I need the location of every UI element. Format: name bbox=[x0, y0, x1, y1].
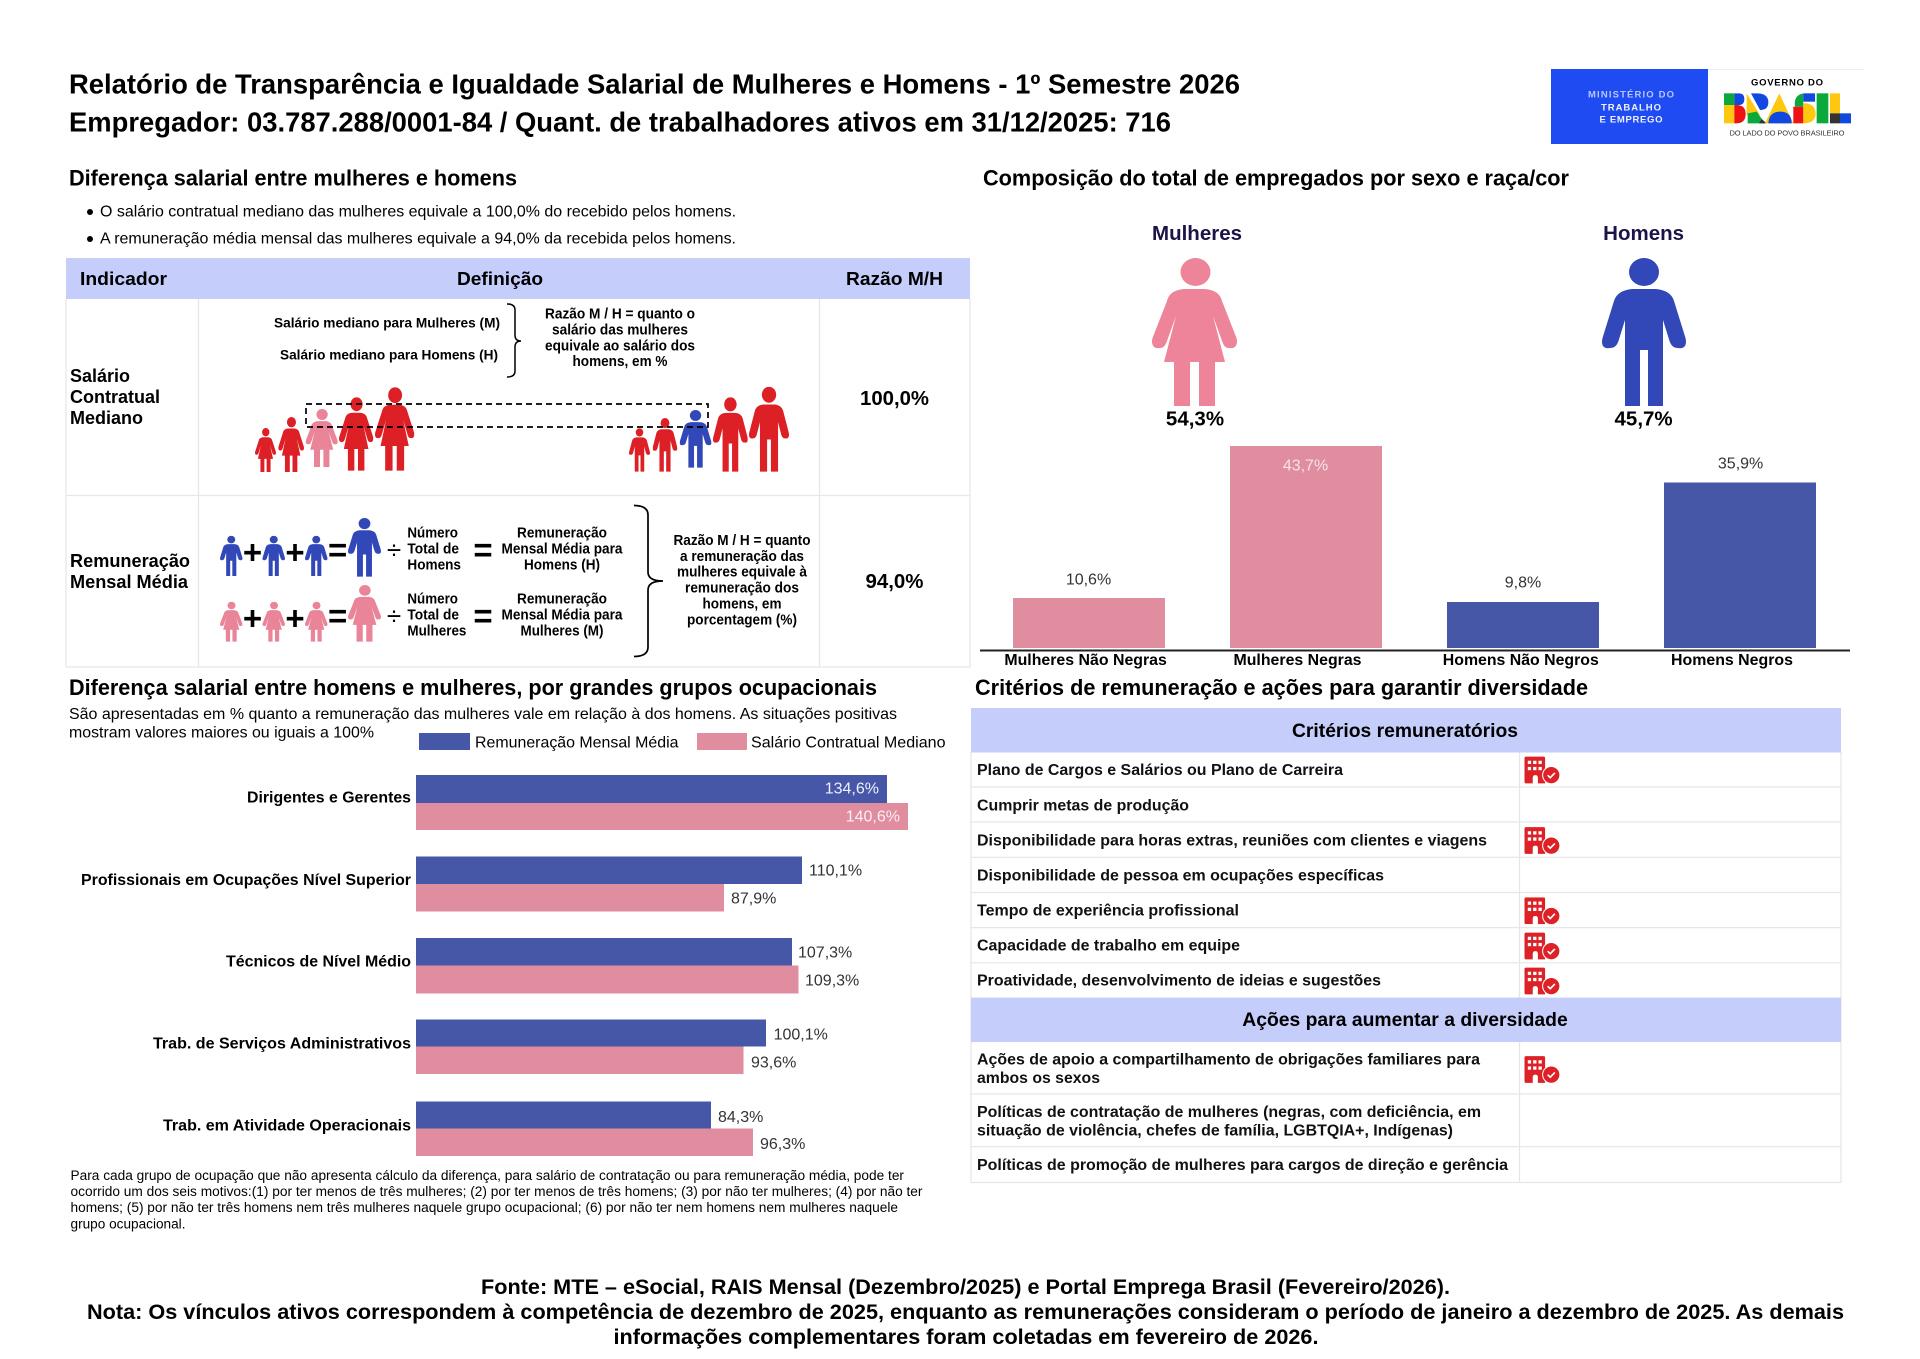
bar chart: composition by race: Homens Não Negros bbox=[1443, 652, 1599, 669]
group: Dirigentes e Gerentes: 140,6% bbox=[846, 808, 900, 826]
panel: composition women bbox=[1152, 222, 1242, 430]
formula: women: Número bbox=[407, 592, 458, 608]
formula: men: Homens bbox=[407, 558, 461, 574]
group: Profissionais bbox=[81, 856, 862, 912]
logo: Governo do Brasil: DO LADO DO POVO BRASILEIRO bbox=[1730, 128, 1845, 138]
row: remuneração mensal média: Remuneração bbox=[70, 551, 190, 571]
actions list: ambos os sexos bbox=[977, 1070, 1100, 1087]
row: salário contratual mediano bbox=[70, 304, 929, 472]
bar chart: composition by race bbox=[980, 446, 1850, 669]
row: remuneração mensal média: mulheres equivale à bbox=[677, 565, 807, 581]
bar chart: composition by race: Mulheres Negras bbox=[1234, 652, 1362, 669]
table header: ações: Ações para aumentar a diversidade bbox=[1242, 1009, 1568, 1031]
legend: Remuneração Mensal Média bbox=[475, 734, 679, 752]
group: Técnicos: Técnicos de Nível Médio bbox=[226, 954, 411, 970]
formula: women bbox=[220, 585, 623, 642]
footer: source and note: informações complementares foram coletadas em fevereiro de 2026. bbox=[614, 1325, 1318, 1349]
footnote: Para cada grupo de ocupação que não apresenta cálculo da diferença, para salário de contratação ou para remuneração média, pode ter bbox=[70, 1168, 904, 1183]
formula: women: + bbox=[285, 600, 305, 636]
table header: Indicador bbox=[80, 268, 167, 289]
bullets bbox=[87, 204, 736, 248]
logo: Ministério do Trabalho e Emprego: TRABALHO bbox=[1601, 102, 1661, 114]
formula: women: ÷ bbox=[387, 601, 401, 631]
formula: men: = bbox=[473, 532, 493, 568]
legend bbox=[419, 733, 946, 752]
actions list bbox=[977, 1052, 1508, 1174]
bar chart: composition by race: 43,7% bbox=[1283, 458, 1328, 474]
group: Técnicos bbox=[226, 938, 859, 994]
formula: men: Número bbox=[407, 526, 458, 542]
formula: men: + bbox=[243, 534, 262, 570]
row: salário contratual mediano: Salário mediano para Homens (H) bbox=[280, 348, 498, 362]
row: remuneração mensal média bbox=[70, 506, 924, 656]
formula: men: = bbox=[328, 532, 347, 568]
heading: composição: Composição do total de empregados por sexo e raça/cor bbox=[983, 166, 1569, 190]
table header: Definição bbox=[457, 268, 543, 289]
formula: women: = bbox=[328, 598, 347, 634]
row: salário contratual mediano: Mediano bbox=[70, 408, 143, 428]
actions list: Políticas de promoção de mulheres para cargos de direção e gerência bbox=[977, 1157, 1508, 1174]
group: Serviços Administrativos bbox=[153, 1020, 828, 1074]
row: remuneração mensal média: Razão M / H = quanto bbox=[674, 533, 811, 549]
criteria list bbox=[977, 762, 1487, 989]
group: Profissionais: Profissionais em Ocupações Nível Superior bbox=[81, 872, 411, 889]
row: salário contratual mediano: Salário mediano para Mulheres (M) bbox=[274, 316, 500, 330]
bullets: O salário contratual mediano das mulheres equivale a 100,0% do recebido pelos homens. bbox=[100, 204, 736, 220]
panel: composition men: Homens bbox=[1603, 222, 1684, 245]
heading: diferença salarial: Diferença salarial entre mulheres e homens bbox=[69, 166, 517, 190]
heading: diferença por grupos ocupacionais: Diferença salarial entre homens e mulheres, por grandes grupos ocupacionais bbox=[69, 675, 877, 700]
row: remuneração mensal média: porcentagem (%) bbox=[687, 613, 797, 629]
formula: women: = bbox=[473, 598, 493, 634]
actions list: Políticas de contratação de mulheres (negras, com deficiência, em bbox=[977, 1104, 1481, 1121]
row: salário contratual mediano: homens, em % bbox=[572, 354, 668, 370]
row: salário contratual mediano: Razão M / H = quanto o bbox=[545, 306, 695, 322]
bar chart: occupational groups bbox=[81, 775, 908, 1156]
formula: women: Mulheres bbox=[407, 624, 466, 640]
icon group: women ordered by salary bbox=[255, 387, 414, 472]
logo: Ministério do Trabalho e Emprego: MINISTÉRIO DO bbox=[1588, 90, 1674, 100]
bar chart: composition by race: 35,9% bbox=[1718, 456, 1763, 472]
table header: critérios remuneratórios bbox=[971, 708, 1841, 752]
description text: São apresentadas em % quanto a remuneração das mulheres vale em relação à dos homens. As situações positivas bbox=[69, 706, 897, 723]
panel: composition men bbox=[1602, 222, 1686, 430]
bar chart: composition by race: 10,6% bbox=[1066, 572, 1111, 588]
icons: criteria adopted bbox=[1524, 757, 1560, 995]
description text bbox=[69, 706, 897, 742]
criteria list: Capacidade de trabalho em equipe bbox=[977, 937, 1240, 954]
group: Serviços Administrativos: Trab. de Serviços Administrativos bbox=[153, 1036, 411, 1052]
row: salário contratual mediano: equivale ao salário dos bbox=[545, 338, 695, 354]
logo: Governo do Brasil: GOVERNO DO bbox=[1751, 78, 1823, 88]
icon: action adopted bbox=[1524, 1056, 1560, 1083]
row: remuneração mensal média: a remuneração das bbox=[680, 549, 804, 565]
logo: Ministério do Trabalho e Emprego bbox=[1551, 69, 1708, 144]
row: remuneração mensal média: homens, em bbox=[702, 596, 782, 612]
footer: source and note: Fonte: MTE – eSocial, RAIS Mensal (Dezembro/2025) e Portal Emprega Brasil (Fevereiro/2026). bbox=[481, 1275, 1450, 1299]
table header: Razão M/H bbox=[846, 268, 943, 289]
group: Atividade Operacionais: 84,3% bbox=[718, 1109, 763, 1126]
group: Atividade Operacionais: 96,3% bbox=[760, 1136, 805, 1153]
table header: critérios remuneratórios: Critérios remuneratórios bbox=[1292, 720, 1518, 742]
formula: women: Total de bbox=[407, 608, 459, 624]
group: Profissionais: 87,9% bbox=[731, 890, 776, 908]
formula: men: + bbox=[285, 534, 305, 570]
panel: composition women: Mulheres bbox=[1152, 222, 1242, 245]
logo: Governo do Brasil bbox=[1708, 69, 1864, 138]
legend: Salário Contratual Mediano bbox=[751, 734, 946, 752]
bar chart: composition by race: Homens Negros bbox=[1671, 652, 1793, 669]
group: Técnicos: 109,3% bbox=[805, 972, 859, 990]
title: Relatório de Transparência e Igualdade Salarial de Mulheres e Homens - 1º Semestre 2026 bbox=[69, 68, 1240, 100]
group: Dirigentes e Gerentes: Dirigentes e Gerentes bbox=[247, 790, 411, 806]
formula: women: Mulheres (M) bbox=[520, 624, 604, 640]
criteria list: Cumprir metas de produção bbox=[977, 797, 1189, 814]
formula: men: Total de bbox=[407, 542, 459, 558]
formula: men: ÷ bbox=[387, 535, 401, 565]
row: remuneração mensal média: 94,0% bbox=[866, 571, 924, 593]
row: salário contratual mediano: 100,0% bbox=[860, 388, 929, 410]
criteria list: Plano de Cargos e Salários ou Plano de Carreira bbox=[977, 762, 1343, 779]
formula: women: + bbox=[243, 600, 262, 636]
panel: composition women: 54,3% bbox=[1166, 407, 1224, 430]
group: Atividade Operacionais: Trab. em Atividade Operacionais bbox=[163, 1118, 411, 1134]
row: salário contratual mediano: Salário bbox=[70, 366, 130, 386]
panel: composition men: 45,7% bbox=[1615, 407, 1673, 430]
formula: women: Mensal Média para bbox=[502, 608, 623, 624]
footnote: ocorrido um dos seis motivos:(1) por ter menos de três mulheres; (2) por ter menos de três homens; (3) por não ter mulheres; (4) por não ter bbox=[70, 1184, 923, 1199]
group: Dirigentes e Gerentes bbox=[247, 775, 908, 830]
bar chart: composition by race: 9,8% bbox=[1505, 574, 1541, 592]
formula: men bbox=[220, 518, 623, 577]
formula: women: Remuneração bbox=[517, 592, 607, 608]
actions list: Ações de apoio a compartilhamento de obrigações familiares para bbox=[977, 1052, 1480, 1068]
criteria list: Disponibilidade de pessoa em ocupações específicas bbox=[977, 867, 1384, 884]
group: Serviços Administrativos: 93,6% bbox=[751, 1054, 796, 1072]
panel: criteria table bbox=[971, 708, 1841, 1182]
footer: source and note bbox=[87, 1275, 1844, 1349]
criteria list: Tempo de experiência profissional bbox=[977, 902, 1239, 919]
formula: men: Remuneração bbox=[517, 526, 607, 542]
criteria list: Proatividade, desenvolvimento de ideias e sugestões bbox=[977, 972, 1381, 989]
row: remuneração mensal média: remuneração dos bbox=[685, 581, 799, 597]
row: remuneração mensal média: Mensal Média bbox=[70, 572, 189, 592]
heading: critérios: Critérios de remuneração e ações para garantir diversidade bbox=[975, 675, 1588, 700]
footnote bbox=[70, 1168, 923, 1231]
footer: source and note: Nota: Os vínculos ativos correspondem à competência de dezembro de 2025, enquanto as remunerações consideram o período de janeiro a dezembro de 2025. As demais bbox=[87, 1300, 1844, 1324]
criteria list: Disponibilidade para horas extras, reuniões com clientes e viagens bbox=[977, 832, 1487, 850]
table header bbox=[66, 258, 970, 299]
group: Profissionais: 110,1% bbox=[809, 862, 862, 880]
group: Dirigentes e Gerentes: 134,6% bbox=[825, 780, 879, 798]
group: Técnicos: 107,3% bbox=[798, 944, 852, 962]
description text: mostram valores maiores ou iguais a 100% bbox=[69, 724, 374, 742]
title: Empregador: 03.787.288/0001-84 / Quant. de trabalhadores ativos em 31/12/2025: 716 bbox=[69, 106, 1171, 138]
group: Atividade Operacionais bbox=[163, 1102, 805, 1156]
panel: indicator table bbox=[66, 258, 970, 667]
formula: men: Homens (H) bbox=[524, 558, 600, 574]
footnote: homens; (5) por não ter três homens nem três mulheres naquele grupo ocupacional; (6) por não ter nem homens nem mulheres naquele bbox=[70, 1200, 898, 1215]
bar chart: composition by race: Mulheres Não Negras bbox=[1004, 652, 1167, 669]
table header: ações bbox=[971, 998, 1841, 1042]
footnote: grupo ocupacional. bbox=[70, 1216, 186, 1231]
formula: men: Mensal Média para bbox=[502, 542, 623, 558]
bullets: A remuneração média mensal das mulheres equivale a 94,0% da recebida pelos homens. bbox=[100, 230, 736, 248]
row: salário contratual mediano: Contratual bbox=[70, 387, 160, 407]
row: salário contratual mediano: salário das mulheres bbox=[552, 322, 688, 338]
actions list: situação de violência, chefes de família, LGBTQIA+, Indígenas) bbox=[977, 1122, 1453, 1140]
group: Serviços Administrativos: 100,1% bbox=[774, 1026, 828, 1044]
icon group: men ordered by salary bbox=[629, 387, 789, 472]
logo: Ministério do Trabalho e Emprego: E EMPREGO bbox=[1600, 114, 1662, 126]
title bbox=[69, 68, 1240, 138]
